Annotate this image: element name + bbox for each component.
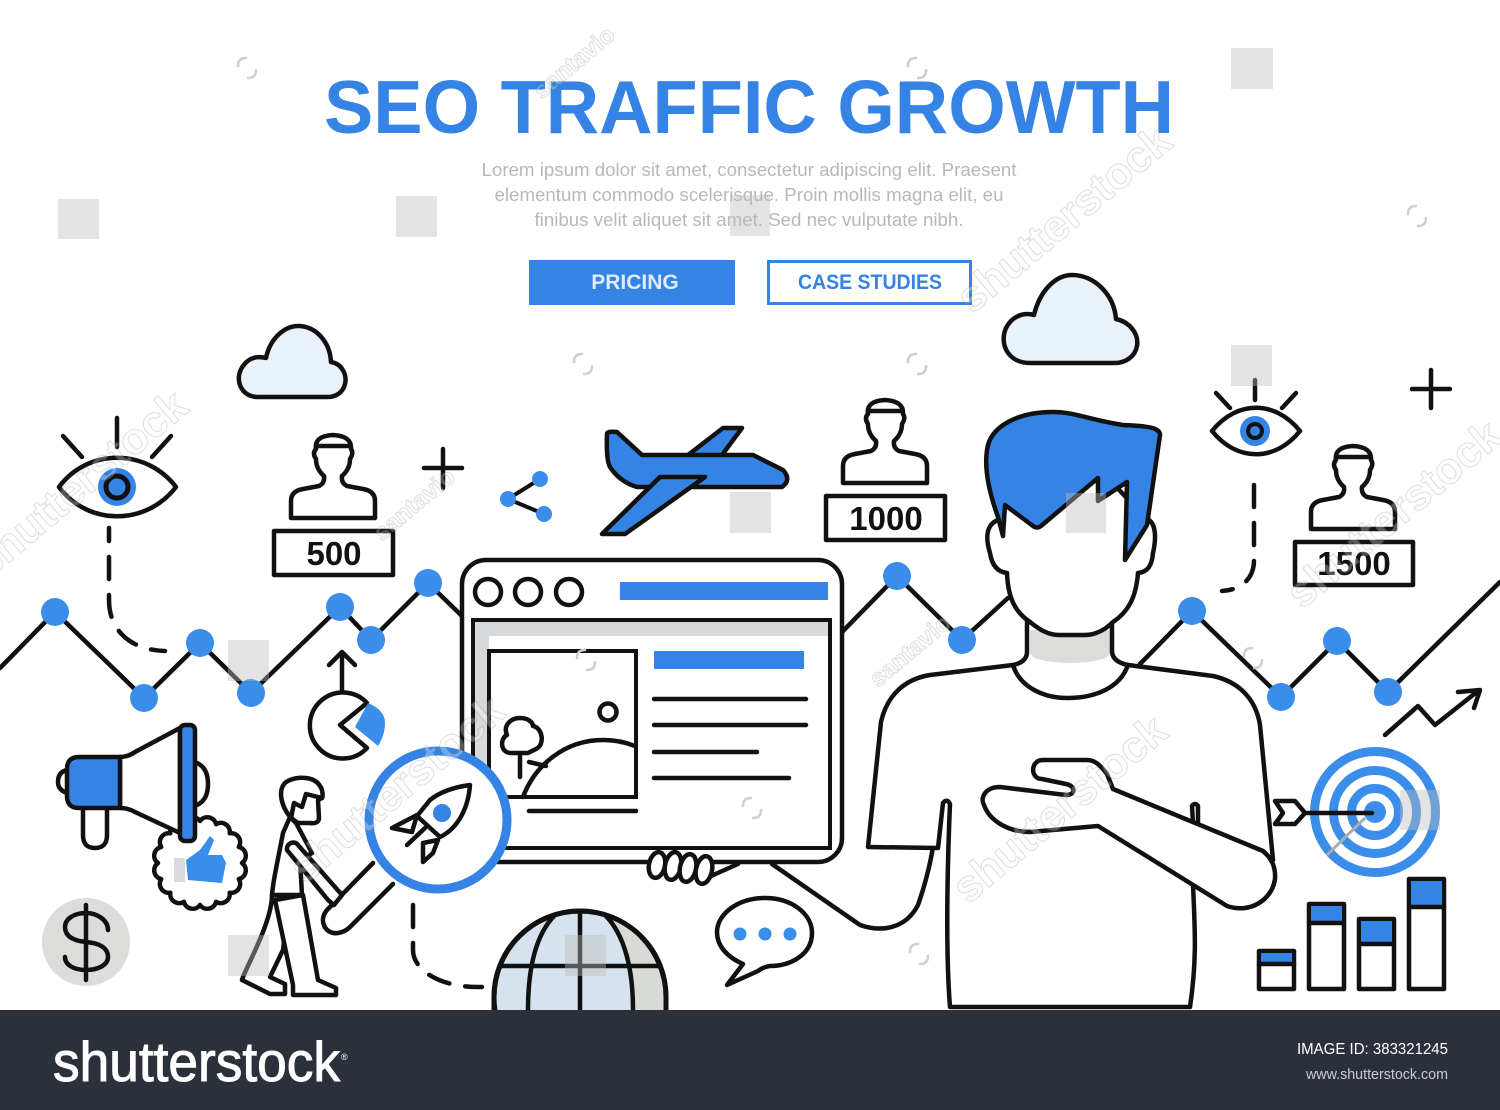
watermark text: shutterstock — [280, 685, 514, 893]
cloud left — [239, 326, 345, 397]
presenter neck — [1030, 630, 1110, 663]
pricing button: PRICING — [591, 271, 679, 294]
icon: dollar coin — [42, 898, 130, 986]
person counter 1000 — [826, 400, 945, 540]
dashed path to globe — [413, 905, 482, 987]
watermark text: santavio — [529, 21, 620, 105]
presenter character — [772, 412, 1275, 1007]
icon: megaphone — [58, 725, 208, 848]
bar chart — [1259, 879, 1444, 989]
case studies button — [768, 262, 970, 304]
browser window — [462, 560, 842, 862]
icon: airplane — [602, 428, 787, 534]
icon: thumbs up gear — [154, 817, 246, 909]
watermark text: shutterstock — [947, 115, 1181, 323]
icon: globe — [492, 908, 668, 1010]
growth arrow — [1385, 690, 1480, 735]
title: SEO TRAFFIC GROWTH — [324, 65, 1174, 149]
presenter body — [868, 665, 1273, 1007]
description text: finibus velit aliquet sit amet. Sed nec vulputate nibh. — [534, 209, 964, 230]
description text: Lorem ipsum dolor sit amet, consectetur adipiscing elit. Praesent — [482, 159, 1017, 180]
rocket badge — [369, 751, 507, 889]
connecting capsule from person to rocket — [323, 863, 393, 933]
target with arrow — [1275, 752, 1436, 872]
watermark squares — [58, 48, 1440, 976]
growth line chart — [0, 562, 1500, 712]
presenter face — [987, 470, 1155, 635]
watermark text: santavio — [865, 609, 956, 693]
footer bar: IMAGE ID: 383321245 — [1297, 1041, 1448, 1058]
dashed path from eye — [109, 528, 165, 651]
presenter shirt outline — [868, 665, 1273, 1007]
small walking person — [242, 778, 342, 995]
person counter 500 — [274, 435, 393, 575]
description text — [482, 159, 1017, 230]
dashed path from right eye — [1222, 485, 1254, 591]
watermark text: shutterstock — [943, 705, 1177, 913]
icon: eye left — [59, 418, 176, 516]
footer bar: www.shutterstock.com — [1305, 1066, 1448, 1083]
pricing button — [529, 260, 735, 305]
person counter 1000: 1000 — [849, 500, 923, 537]
watermark logo marks — [238, 58, 1426, 964]
footer bar: ® — [341, 1052, 348, 1062]
cloud right — [1004, 275, 1137, 363]
description text: elementum commodo scelerisque. Proin mollis magna elit, eu — [495, 184, 1003, 205]
speech bubble — [717, 898, 812, 985]
icon: share — [500, 471, 552, 522]
person counter 1500: 1500 — [1317, 545, 1391, 582]
hand under browser — [646, 851, 738, 885]
case studies button: CASE STUDIES — [798, 271, 942, 294]
plus right — [1412, 370, 1450, 408]
icon: eye right — [1212, 380, 1300, 454]
person counter 500: 500 — [306, 535, 362, 572]
plus left — [424, 449, 462, 488]
presenter hair — [986, 412, 1160, 560]
watermark text: santavio — [369, 463, 460, 547]
presenter hand — [983, 760, 1275, 908]
person counter 1500 — [1295, 446, 1413, 585]
footer bar — [0, 1010, 1500, 1110]
presenter neck and collar lines — [1013, 622, 1128, 698]
presenter arm — [772, 847, 933, 928]
pie chart with arrow — [310, 652, 385, 758]
footer bar: shutterstock — [53, 1030, 341, 1093]
